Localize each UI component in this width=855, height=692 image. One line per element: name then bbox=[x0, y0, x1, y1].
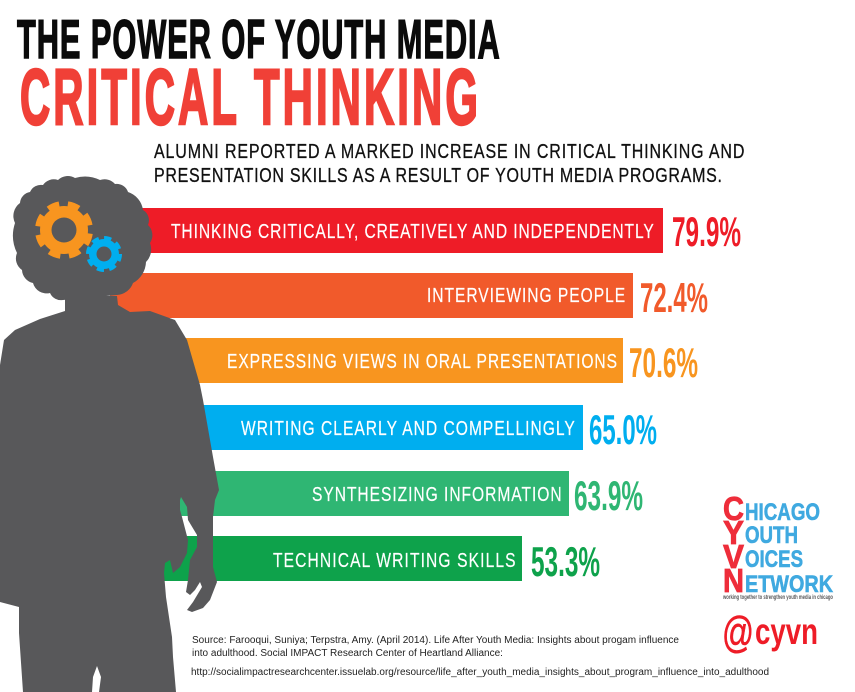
bar: technical writing 53.3%: TECHNICAL WRITING SKILLS bbox=[273, 549, 516, 571]
bar: writing clearly 65.0%: WRITING CLEARLY AND COMPELLINGLY bbox=[241, 417, 575, 439]
bar: expressing views 70.6%: 70.6% bbox=[629, 339, 698, 386]
bar: interviewing people 72.4%: 72.4% bbox=[640, 274, 708, 321]
intro text bbox=[154, 140, 744, 186]
bar: synthesizing information 63.9%: SYNTHESIZING INFORMATION bbox=[312, 483, 562, 505]
bar: thinking critically 79.9%: 79.9% bbox=[672, 208, 741, 255]
logo: chicago youth voices network bbox=[722, 490, 834, 601]
title: the power of youth media: THE POWER OF YOUTH MEDIA bbox=[17, 10, 500, 70]
bar: technical writing 53.3%: 53.3% bbox=[531, 538, 600, 585]
social handle: @cyvn bbox=[722, 608, 818, 657]
bar: technical writing 53.3% bbox=[160, 536, 600, 585]
source citation: into adulthood. Social IMPACT Research Center of Heartland Alliance: bbox=[192, 648, 503, 659]
social handle: @cyvn: cyvn bbox=[755, 611, 818, 652]
heading: critical thinking: CRITICAL THINKING bbox=[20, 54, 478, 141]
logo: chicago youth voices network: Y bbox=[723, 514, 744, 551]
icon: blue gear bbox=[88, 238, 120, 270]
source citation: http://socialimpactresearchcenter.issuelab.org/resource/life_after_youth_media_insights_about_program_influence_into_adulthood bbox=[191, 667, 769, 678]
intro text: ALUMNI REPORTED A MARKED INCREASE IN CRITICAL THINKING AND bbox=[154, 140, 744, 162]
bar: expressing views 70.6% bbox=[150, 338, 698, 386]
social handle: @cyvn: @ bbox=[722, 608, 754, 657]
logo: chicago youth voices network: ETWORK bbox=[745, 571, 834, 598]
source citation bbox=[191, 635, 769, 678]
logo: chicago youth voices network: V bbox=[723, 538, 744, 575]
bar: synthesizing information 63.9%: 63.9% bbox=[574, 472, 643, 519]
logo: chicago youth voices network: HICAGO bbox=[745, 499, 820, 526]
logo: chicago youth voices network: C bbox=[723, 490, 744, 527]
icon: orange gear bbox=[35, 201, 93, 259]
bar: thinking critically 79.9% bbox=[120, 208, 741, 255]
bar: thinking critically 79.9%: THINKING CRITICALLY, CREATIVELY AND INDEPENDENTLY bbox=[171, 220, 654, 242]
bar: interviewing people 72.4% bbox=[110, 273, 708, 321]
logo: chicago youth voices network: N bbox=[723, 562, 744, 599]
silhouette: person with afro hair bbox=[0, 176, 219, 692]
source citation: Source: Farooqui, Suniya; Terpstra, Amy. (April 2014). Life After Youth Media: Insights about progam influence bbox=[192, 635, 679, 646]
logo: chicago youth voices network: OICES bbox=[745, 546, 803, 573]
logo: chicago youth voices network: OUTH bbox=[745, 522, 798, 549]
bar: interviewing people 72.4%: INTERVIEWING PEOPLE bbox=[427, 284, 625, 306]
bar: writing clearly 65.0%: 65.0% bbox=[589, 406, 657, 453]
bar: synthesizing information 63.9% bbox=[170, 471, 643, 519]
intro text: PRESENTATION SKILLS AS A RESULT OF YOUTH MEDIA PROGRAMS. bbox=[154, 164, 722, 186]
bar: writing clearly 65.0% bbox=[170, 405, 657, 453]
bar: expressing views 70.6%: EXPRESSING VIEWS IN ORAL PRESENTATIONS bbox=[227, 350, 617, 372]
